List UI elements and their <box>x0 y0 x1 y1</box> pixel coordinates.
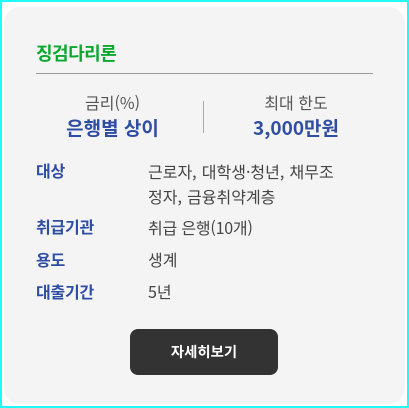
label: purpose: 용도 <box>36 247 65 271</box>
value: purpose: 생계 <box>148 247 177 271</box>
interest rate value: 은행별 상이 <box>66 114 159 141</box>
button: details <box>130 329 278 375</box>
value: target <box>148 159 334 208</box>
value: target: 정자, 금융취약계층 <box>148 184 275 208</box>
value: target: 근로자, 대학생·청년, 채무조 <box>148 159 334 183</box>
label: target: 대상 <box>36 158 65 182</box>
stat divider <box>203 101 204 133</box>
label: loan period: 대출기간 <box>36 279 94 303</box>
title divider <box>36 73 373 74</box>
title: 징검다리론 <box>36 40 116 66</box>
stat: maximum limit <box>253 90 339 141</box>
value: loan period: 5년 <box>148 279 172 303</box>
interest rate label: 금리(%) <box>85 90 140 114</box>
stat: interest rate <box>66 90 159 141</box>
maximum limit value: 3,000만원 <box>253 114 339 141</box>
button: details: 자세히보기 <box>171 341 237 362</box>
label: institutions: 취급기관 <box>36 214 94 238</box>
value: institutions: 취급 은행(10개) <box>148 215 253 239</box>
maximum limit label: 최대 한도 <box>264 90 328 114</box>
